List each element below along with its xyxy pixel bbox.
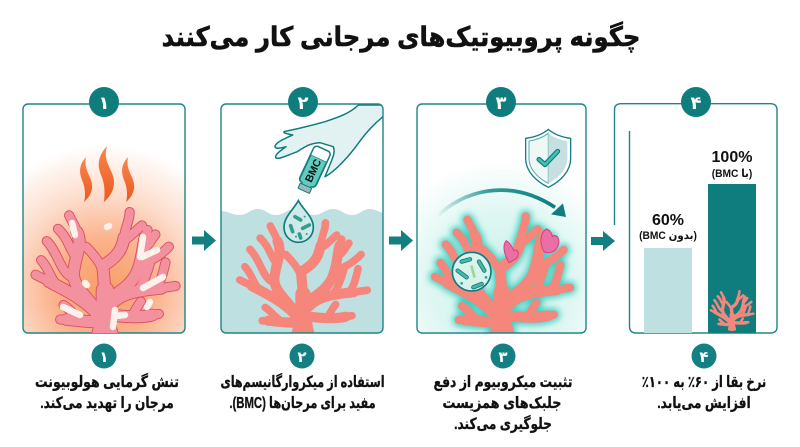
icon: shield with check [526,129,571,187]
icon: small coral [711,291,753,329]
caption 1: تنش گرمایی هولوبیونت [35,373,179,391]
badge: top 2 [288,87,318,117]
icon: microbe magnifier [452,252,491,291]
illustration: healthy coral [240,223,367,336]
bar: with BMC [708,149,756,333]
caption 1 [35,344,179,412]
caption 1: ۱ [99,349,109,366]
caption 4: ۴ [699,349,709,366]
caption 2: استفاده از میکروارگانیسم‌های [220,372,385,390]
arrow: step 3 to 4 [591,231,615,251]
caption 4 [642,344,766,412]
badge: top 1 [89,87,119,117]
caption 2: ۲ [297,349,307,366]
illustration: bleached coral [36,212,176,336]
panel: microbiome stabilisation [417,104,586,336]
caption 3: جلوگیری می‌کند. [454,415,552,433]
caption 3: تثبیت میکروبیوم از دفع [434,373,572,391]
badge: top 4 [681,87,711,117]
bar: without BMC: (بدون BMC) [639,230,697,242]
arrow: step 2 to 3 [389,230,413,251]
caption 4: نرخ بقا از ۶۰٪ به ۱۰۰٪ [642,373,766,390]
panel: heat stress [23,104,185,336]
icon: heat flames [80,146,134,202]
caption 3: جلبک‌های همزیست [442,395,562,412]
panel: survival chart [614,104,777,333]
coral glow [435,216,570,336]
water [221,209,384,334]
icon: hand with BMC bottle [275,105,384,195]
badge: top 1: ۱ [98,93,110,113]
bar: with BMC: (با BMC) [712,168,752,180]
caption 3 [434,344,572,433]
caption 3: ۳ [498,349,508,366]
bar: without BMC [639,212,697,333]
badge: top 3: ۳ [496,93,506,113]
illustration: coral with microbiome [435,216,570,336]
caption 2: مفید برای مرجان‌ها (BMC). [229,394,376,411]
badge: top 3 [486,87,516,117]
arrow: protective arc [437,190,566,217]
icon: microbe droplet [284,201,313,242]
badge: top 4: ۴ [690,93,702,113]
arrow: step 1 to 2 [192,230,216,251]
bar: without BMC: 60% [652,212,684,229]
bar: with BMC: 100% [712,149,752,166]
icon: symbiotic algae [504,229,559,263]
badge: top 2: ۲ [298,93,308,113]
caption 4: افزایش می‌یابد. [657,394,751,412]
caption 1: مرجان را تهدید می‌کند. [40,394,174,412]
panel: BMC application [221,104,384,336]
icon: bottle: BMC [303,157,324,184]
caption 2 [220,344,385,411]
title: چگونه پروبیوتیک‌های مرجانی کار می‌کنند [162,21,640,53]
